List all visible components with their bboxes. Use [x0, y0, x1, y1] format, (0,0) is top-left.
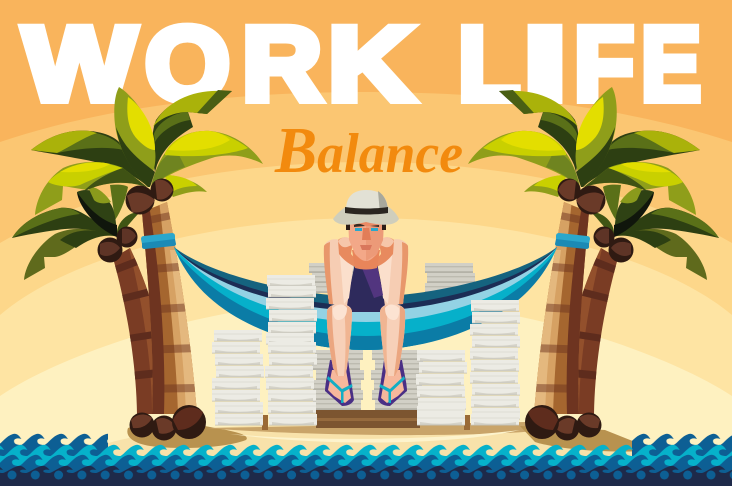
hammock	[174, 247, 557, 350]
title: WORK LIFE: E	[641, 6, 701, 123]
paper stack 2	[265, 275, 317, 426]
title: WORK LIFE: O	[145, 6, 230, 123]
paper stack 1	[212, 330, 264, 426]
subtitle: Balance: Balance	[274, 114, 463, 187]
tank top highlight	[362, 263, 383, 298]
right arm and leg	[366, 237, 408, 406]
title: WORK LIFE: F	[574, 6, 634, 123]
person sitting on hammock	[324, 190, 408, 406]
paper stack 3	[416, 350, 467, 426]
left arm and leg	[324, 237, 366, 406]
hammock ring right	[555, 233, 590, 249]
title: WORK LIFE: I	[523, 6, 567, 123]
sand island	[85, 422, 660, 486]
title: WORK LIFE: L	[458, 6, 520, 123]
title: WORK LIFE: K	[328, 6, 414, 123]
neck	[352, 250, 380, 270]
paper stacks behind hammock	[309, 263, 475, 410]
title: WORK LIFE: W	[23, 6, 136, 123]
waves	[0, 433, 732, 486]
wooden platform	[262, 410, 470, 430]
title: WORK LIFE: R	[242, 6, 322, 123]
hat	[333, 190, 399, 225]
tank top	[345, 263, 387, 312]
palm trees right	[468, 87, 719, 440]
palm trees left	[12, 87, 263, 440]
head	[346, 212, 386, 261]
paper stack 4	[470, 300, 520, 426]
hammock ring left	[141, 233, 176, 249]
title: WORK LIFE	[23, 6, 701, 123]
